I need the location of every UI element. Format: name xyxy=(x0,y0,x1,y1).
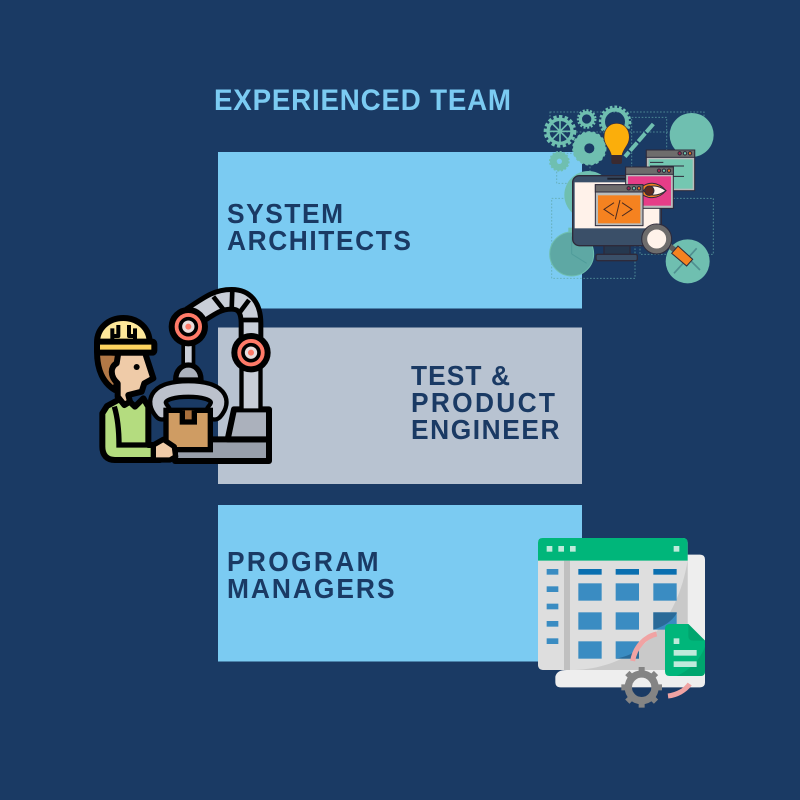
gears xyxy=(545,107,653,171)
label: test and product engineer: ENGINEER xyxy=(411,413,560,445)
stopwatch xyxy=(550,228,594,276)
icon: factory worker with robot arm xyxy=(97,289,269,461)
window: code tag xyxy=(595,185,643,226)
icon: software development xyxy=(545,107,714,283)
row labels xyxy=(547,569,558,644)
label: program managers: MANAGERS xyxy=(227,572,395,604)
title: EXPERIENCED TEAM xyxy=(214,84,511,117)
label: system architects: ARCHITECTS xyxy=(227,224,411,256)
wrench and tools xyxy=(674,248,700,273)
table cells xyxy=(578,583,677,659)
worker body xyxy=(102,397,160,460)
window: code lines xyxy=(646,150,695,191)
window: eye xyxy=(626,167,673,208)
back sheet xyxy=(555,555,705,687)
worker head xyxy=(97,352,153,405)
green document xyxy=(665,624,705,676)
icon: spreadsheet document xyxy=(538,538,705,708)
monitor xyxy=(573,176,661,261)
magnifier xyxy=(642,224,693,266)
worker hand xyxy=(153,439,176,460)
light bulb xyxy=(604,123,629,164)
label: program managers: PROGRAM xyxy=(227,545,379,577)
gripper xyxy=(158,389,219,412)
label: test and product engineer: PRODUCT xyxy=(411,386,555,418)
label: system architects: SYSTEM xyxy=(227,197,343,229)
hard hat xyxy=(97,318,154,353)
label: test and product engineer xyxy=(411,359,560,445)
robot arm xyxy=(172,289,268,408)
cycle arrows xyxy=(633,634,690,696)
box xyxy=(166,410,210,450)
header bar xyxy=(538,538,688,561)
panel: program managers xyxy=(218,505,582,662)
label: system architects xyxy=(227,197,411,256)
machine base xyxy=(175,409,269,461)
column headers xyxy=(578,569,677,575)
panel: system architects xyxy=(218,152,582,308)
main sheet xyxy=(538,538,688,670)
gear xyxy=(621,667,662,708)
background dotted frames xyxy=(550,112,713,278)
label: test and product engineer: TEST & xyxy=(411,359,510,391)
label: program managers xyxy=(227,545,395,604)
panel: test and product engineer xyxy=(218,328,582,484)
background circles xyxy=(564,113,714,283)
